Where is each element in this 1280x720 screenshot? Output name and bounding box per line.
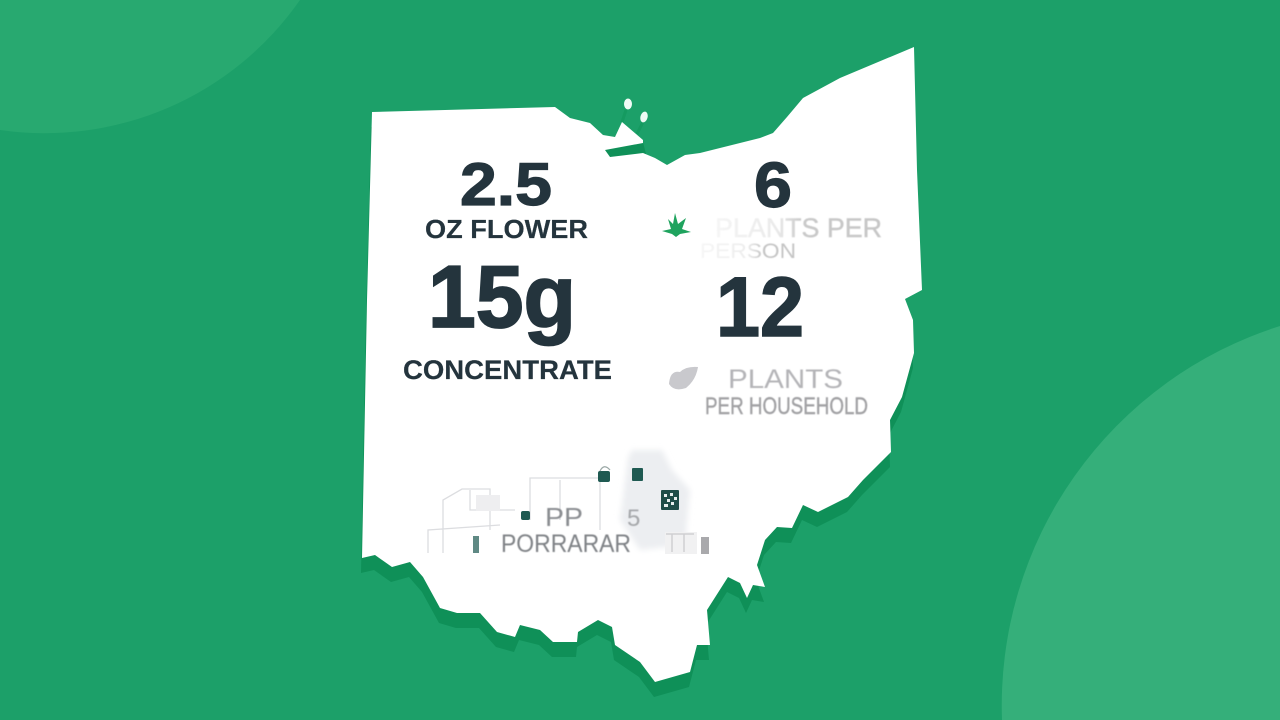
- text: faded dispensary label: PORRARAR: [501, 530, 631, 558]
- map shadow: [361, 62, 921, 697]
- stat: 6 plants per person: [700, 149, 882, 263]
- stat: 6 plants per person: PERSON: [700, 240, 796, 263]
- text: faded dispensary label: 5: [627, 505, 640, 532]
- text: faded dispensary label: PP: [545, 502, 583, 532]
- stat: 2.5 oz flower: OZ FLOWER: [425, 214, 588, 244]
- stat: 2.5 oz flower: 2.5: [460, 151, 552, 218]
- icon: teal square with dots: [661, 490, 679, 510]
- decorative circle: top left: [0, 0, 300, 133]
- text: faded dispensary label: [501, 502, 640, 558]
- icon: faded grey leaf: [669, 367, 698, 389]
- stat: 6 plants per person: 6: [754, 149, 792, 221]
- icon: green cannabis leaf: [662, 213, 691, 237]
- stat: 15g concentrate: [403, 247, 612, 385]
- stat: 6 plants per person: PLANTS PER: [715, 213, 882, 243]
- stat: 15g concentrate: CONCENTRATE: [403, 355, 612, 385]
- stat: 2.5 oz flower: [425, 151, 588, 244]
- stat: 12 plants per household: PER HOUSEHOLD: [705, 393, 868, 420]
- decorative circle: bottom right: [1002, 326, 1280, 720]
- stat: 12 plants per household: [705, 260, 868, 420]
- icon: teal markers: [473, 467, 709, 554]
- stat: 15g concentrate: 15g: [428, 247, 576, 346]
- stat: 12 plants per household: PLANTS: [728, 364, 843, 394]
- illustration: faded dispensary buildings: [428, 450, 697, 554]
- map: lake sliver: [604, 142, 646, 158]
- icon: lake droplets: [622, 98, 649, 134]
- map: Ohio silhouette: [362, 47, 922, 682]
- stat: 12 plants per household: 12: [716, 260, 804, 354]
